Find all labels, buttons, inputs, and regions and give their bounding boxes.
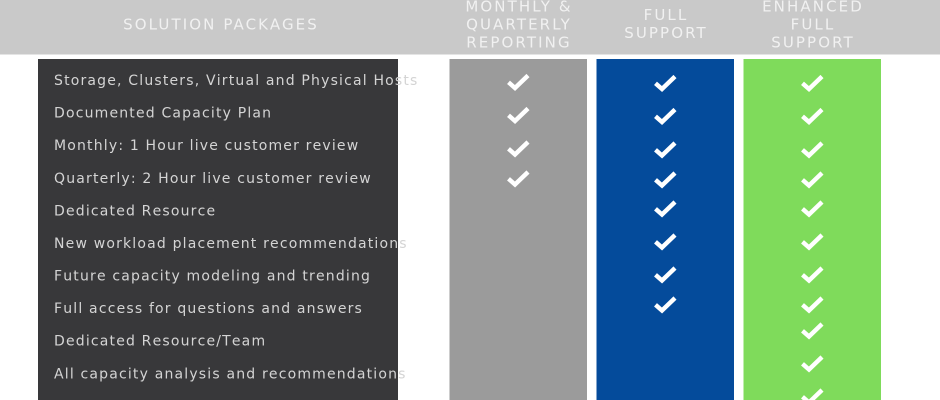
- panel: feature list: [38, 59, 419, 400]
- checkmarks: full support: [656, 76, 675, 310]
- checkmarks: enhanced full support: [802, 76, 822, 400]
- feature rows: Monthly: 1 Hour live customer review: [54, 138, 359, 154]
- feature rows: Future capacity modeling and trending: [54, 268, 371, 284]
- heading: full support: SUPPORT: [624, 24, 708, 42]
- feature rows: New workload placement recommendations: [54, 236, 408, 252]
- feature rows: Dedicated Resource/Team: [54, 334, 266, 350]
- heading: enhanced full support: FULL: [791, 16, 835, 34]
- feature rows: Storage, Clusters, Virtual and Physical Hosts: [54, 73, 419, 89]
- heading: monthly and quarterly reporting: REPORTING: [466, 34, 572, 52]
- feature rows: [54, 73, 419, 382]
- panel: full support column: [596, 59, 734, 400]
- panel: enhanced full support column: [744, 59, 881, 400]
- panel: monthly and quarterly reporting column: [450, 59, 587, 400]
- header band: [0, 0, 940, 54]
- feature rows: Full access for questions and answers: [54, 301, 363, 317]
- heading: monthly and quarterly reporting: QUARTERLY: [466, 16, 572, 34]
- heading: full support: FULL: [644, 6, 688, 24]
- checkmarks: monthly and quarterly: [508, 76, 528, 184]
- feature rows: Dedicated Resource: [54, 204, 216, 220]
- heading: solution packages: SOLUTION PACKAGES: [123, 16, 319, 34]
- feature rows: Documented Capacity Plan: [54, 106, 272, 122]
- feature rows: All capacity analysis and recommendations: [54, 366, 407, 382]
- feature rows: Quarterly: 2 Hour live customer review: [54, 171, 372, 187]
- heading: enhanced full support: SUPPORT: [771, 34, 855, 52]
